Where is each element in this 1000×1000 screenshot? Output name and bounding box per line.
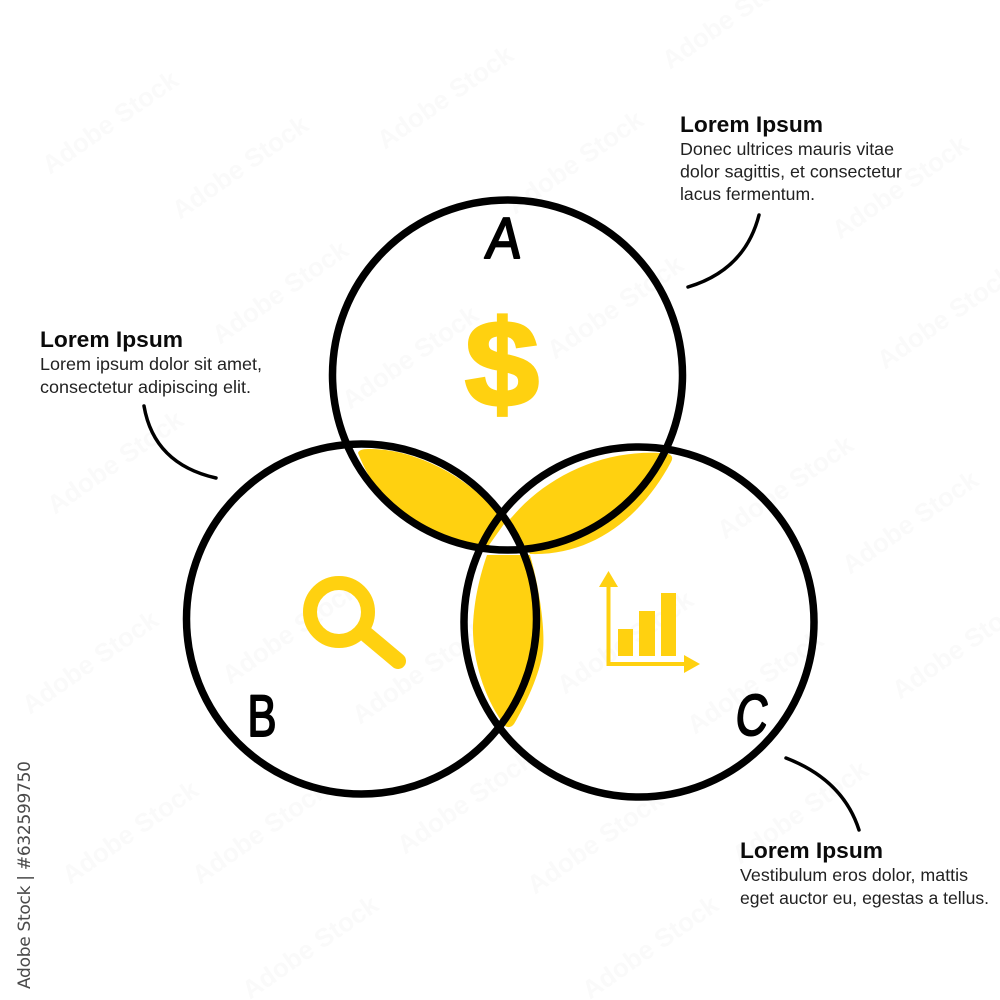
text block: left callout: consectetur adipiscing elit. <box>40 377 251 397</box>
watermark pattern: Adobe Stock <box>346 614 494 730</box>
venn circles <box>186 200 814 797</box>
watermark pattern: Adobe Stock <box>216 574 364 690</box>
overlap: B and C <box>473 555 543 727</box>
circle A <box>332 200 682 550</box>
text block: left callout: Lorem Ipsum <box>40 327 183 352</box>
watermark pattern: Adobe Stock <box>36 64 184 180</box>
icon: bar chart <box>599 571 700 673</box>
watermark pattern: Adobe Stock <box>206 234 354 350</box>
text block: top callout: Donec ultrices mauris vitae <box>680 139 894 159</box>
watermark pattern: Adobe Stock <box>551 584 699 700</box>
text block: left callout <box>40 327 262 397</box>
text block: top callout: lacus fermentum. <box>680 184 815 204</box>
text block: bottom callout: Lorem Ipsum <box>740 838 883 863</box>
icon: dollar sign: $ <box>465 295 539 432</box>
watermark pattern: Adobe Stock <box>836 464 984 580</box>
text block: left callout: Lorem ipsum dolor sit amet, <box>40 354 262 374</box>
watermark pattern: Adobe Stock <box>336 299 484 415</box>
text block: top callout: dolor sagittis, et consectetur <box>680 162 902 182</box>
text block: top callout: Lorem Ipsum <box>680 112 823 137</box>
text block: bottom callout: Vestibulum eros dolor, mattis <box>740 865 968 885</box>
connector: top callout <box>688 215 759 287</box>
letter A: A <box>483 206 525 271</box>
text block: bottom callout: eget auctor eu, egestas a tellus. <box>740 888 989 908</box>
icon: magnifying glass <box>310 583 398 661</box>
circle B <box>186 444 536 794</box>
connector: left callout <box>144 406 216 478</box>
watermark pattern: Adobe Stock <box>711 429 859 545</box>
watermark pattern: Adobe Stock <box>681 624 829 740</box>
watermark pattern: Adobe Stock <box>391 744 539 860</box>
circle C <box>464 447 814 797</box>
watermark pattern: Adobe Stock <box>371 39 519 155</box>
watermark pattern: Adobe Stock <box>166 109 314 225</box>
overlap: A and B <box>358 449 504 548</box>
overlap: A and C <box>505 453 672 554</box>
stock id label: Adobe Stock | #632599750 <box>15 761 35 989</box>
watermark pattern: Adobe Stock <box>521 784 669 900</box>
watermark pattern: Adobe Stock <box>726 754 874 870</box>
watermark pattern: Adobe Stock <box>186 774 334 890</box>
watermark pattern: Adobe Stock <box>826 129 974 245</box>
overlap regions <box>358 449 672 727</box>
watermark pattern: Adobe Stock <box>41 404 189 520</box>
letter C: C <box>733 683 771 748</box>
watermark pattern: Adobe Stock <box>501 104 649 220</box>
connector: bottom callout <box>786 758 859 830</box>
text block: top callout <box>680 112 902 204</box>
watermark pattern: Adobe Stock <box>16 604 164 720</box>
watermark pattern: Adobe Stock <box>56 774 204 890</box>
callout arrows <box>144 215 859 830</box>
letter B: B <box>248 684 276 749</box>
text block: bottom callout <box>740 838 989 908</box>
watermark pattern: Adobe Stock <box>541 249 689 365</box>
